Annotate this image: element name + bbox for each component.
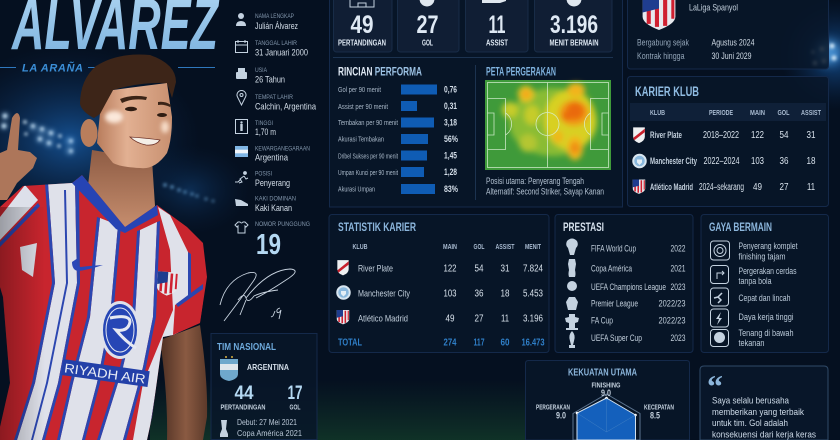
row: total: 117 bbox=[474, 338, 485, 348]
achievement years: 2021 bbox=[670, 264, 686, 274]
club career header: MAIN bbox=[750, 108, 765, 117]
age: 26 Tahun bbox=[255, 74, 285, 86]
performance bars bbox=[401, 84, 437, 194]
icon: calendar bbox=[236, 40, 248, 52]
row: Atletico Madrid: 3.196 bbox=[523, 314, 543, 324]
height: 1,70 m bbox=[255, 127, 276, 138]
row: Atletico Madrid: 11 bbox=[501, 314, 509, 324]
performance values: 1,45 bbox=[444, 150, 457, 160]
performance labels bbox=[338, 87, 398, 194]
club career header: KLUB bbox=[650, 108, 665, 117]
heatmap caption: Posisi utama: Penyerang Tengah bbox=[486, 176, 584, 186]
panel: career statistics bbox=[329, 214, 549, 352]
radar labels: 9.0 bbox=[601, 388, 611, 398]
trophy icons bbox=[565, 238, 579, 348]
full name: Julián Álvarez bbox=[255, 21, 298, 32]
player photo illustration bbox=[0, 54, 210, 440]
panel: playing style bbox=[701, 214, 828, 352]
row: Atletico Madrid: 11 bbox=[807, 182, 815, 193]
panel: playing style: Daya kerja tinggi bbox=[738, 312, 794, 322]
row: Atletico Madrid: 49 bbox=[446, 314, 455, 324]
panel: current club: LaLiga Spanyol bbox=[689, 2, 738, 14]
birth place bbox=[255, 94, 317, 112]
panel: playing style: Penyerang komplet bbox=[738, 241, 798, 251]
dominant foot bbox=[255, 196, 296, 211]
row: Manchester City: 18 bbox=[500, 288, 510, 300]
stat card: minutes bbox=[534, 0, 612, 52]
row: River Plate: River Plate bbox=[358, 264, 393, 274]
pointing hand bbox=[0, 113, 37, 200]
panel: overview and performance bbox=[330, 0, 622, 207]
stat card: matches: PERTANDINGAN bbox=[338, 38, 386, 48]
panel: national team: GOL bbox=[290, 404, 301, 412]
row: Manchester City bbox=[632, 154, 816, 168]
radar labels bbox=[536, 380, 674, 420]
achievement names: FIFA World Cup bbox=[591, 244, 636, 254]
panel: club career bbox=[628, 76, 828, 206]
panel: national team bbox=[211, 334, 317, 440]
subtitle: La Araña: LA ARAÑA bbox=[22, 62, 83, 74]
panel: national team: 44 bbox=[234, 383, 254, 404]
icon: movement arrow bbox=[710, 266, 728, 284]
club crest on shirt bbox=[156, 271, 178, 296]
panel: club career: KARIER KLUB bbox=[635, 84, 699, 99]
achievement years bbox=[658, 244, 686, 343]
performance values: 56% bbox=[444, 134, 458, 144]
row: Atletico Madrid: 2024–sekarang bbox=[699, 182, 744, 193]
row: Atletico Madrid: 27 bbox=[474, 314, 484, 324]
performance values: 0,31 bbox=[444, 101, 457, 111]
panel: national team: PERTANDINGAN bbox=[220, 404, 266, 412]
row: Manchester City: 103 bbox=[444, 288, 457, 300]
icon: target bbox=[710, 241, 730, 260]
performance labels: Assist per 90 menit bbox=[338, 104, 388, 111]
stat card: goals: 27 bbox=[416, 11, 438, 39]
stadium lights right bbox=[811, 40, 840, 65]
row: River Plate: 31 bbox=[500, 264, 510, 274]
panel: national team: ARGENTINA bbox=[247, 362, 289, 372]
nationality bbox=[255, 146, 310, 164]
achievement years: 2022/23 bbox=[658, 298, 686, 308]
player eyes and brows bbox=[120, 96, 171, 117]
performance labels: Dribel Sukses per 90 menit bbox=[338, 154, 398, 160]
quote mark: “ bbox=[707, 368, 723, 404]
panel: quote: Saya selalu berusaha bbox=[712, 396, 790, 406]
icon: runner bbox=[235, 172, 248, 183]
panel: quote bbox=[700, 366, 828, 440]
performance labels: Tembakan per 90 menit bbox=[338, 120, 398, 127]
icon: location pin bbox=[237, 90, 246, 105]
nationality: Argentina bbox=[255, 152, 289, 164]
stat card: minutes: 3.196 bbox=[550, 11, 598, 39]
panel: national team: TIM NASIONAL bbox=[217, 341, 276, 353]
table header: MAIN bbox=[443, 242, 457, 251]
table header: MENIT bbox=[525, 242, 541, 251]
performance breakdown: RINCIAN PERFORMA bbox=[338, 66, 422, 78]
stat card: assists: ASSIST bbox=[486, 38, 509, 48]
shirt collar bbox=[72, 175, 158, 233]
row: total: TOTAL bbox=[338, 338, 362, 348]
position: Penyerang bbox=[255, 178, 290, 189]
achievement names: Premier League bbox=[591, 298, 638, 308]
player neck bbox=[88, 150, 155, 232]
birth date: 31 Januari 2000 bbox=[255, 48, 308, 58]
row: Manchester City: Manchester City bbox=[358, 288, 410, 300]
club career header bbox=[630, 103, 826, 121]
row: Atletico Madrid bbox=[633, 180, 815, 194]
radar labels: PERGERAKAN bbox=[536, 402, 570, 412]
panel: current club: Agustus 2024 bbox=[712, 38, 754, 48]
row: Manchester City: Manchester City bbox=[650, 156, 697, 167]
age: USIA bbox=[255, 67, 267, 74]
row: Atletico Madrid bbox=[337, 310, 543, 324]
achievement names: UEFA Super Cup bbox=[591, 333, 642, 343]
icon: brain bbox=[710, 330, 728, 346]
performance values: 1,28 bbox=[444, 167, 457, 177]
shirt number: NOMOR PUNGGUNG bbox=[255, 221, 310, 228]
row: River Plate: 122 bbox=[444, 264, 457, 274]
achievement names bbox=[591, 244, 666, 343]
birth place: Calchin, Argentina bbox=[255, 102, 317, 112]
performance breakdown bbox=[338, 66, 458, 194]
stadium lights left bbox=[1, 113, 214, 202]
radar labels: 8.5 bbox=[650, 410, 660, 420]
panel: achievements: PRESTASI bbox=[563, 222, 604, 234]
row: River Plate: 7.824 bbox=[523, 264, 543, 274]
stat card: matches: 49 bbox=[350, 11, 374, 39]
player arm bbox=[160, 325, 207, 440]
height bbox=[255, 120, 276, 136]
icon: lightning bbox=[710, 309, 728, 327]
age bbox=[255, 68, 284, 82]
heatmap caption bbox=[486, 176, 604, 196]
panel: achievements bbox=[555, 214, 693, 352]
panel: playing style: Tenang di bawah bbox=[738, 328, 794, 338]
dominant foot: Kaki Kanan bbox=[255, 203, 292, 214]
performance labels: Akurasi Umpan bbox=[338, 186, 375, 194]
stat card: minutes: MENIT BERMAIN bbox=[550, 38, 598, 48]
row: River Plate bbox=[337, 260, 543, 275]
radar labels: KECEPATAN bbox=[644, 402, 674, 412]
signature bbox=[220, 269, 295, 321]
shirt number: 19 bbox=[256, 229, 281, 261]
performance values: 0,76 bbox=[444, 84, 457, 94]
stat card: goals bbox=[398, 0, 459, 52]
stat card: matches bbox=[334, 0, 392, 52]
position: POSISI bbox=[255, 170, 272, 178]
achievement years: 2022/23 bbox=[658, 316, 686, 326]
pitch lines bbox=[488, 82, 608, 168]
panel: playing style: Pergerakan cerdas bbox=[738, 266, 797, 276]
full name bbox=[255, 14, 298, 29]
icon: person bbox=[236, 13, 246, 26]
radar labels: FINISHING bbox=[592, 380, 621, 390]
birth place: TEMPAT LAHIR bbox=[255, 94, 293, 101]
panel: playing style: tanpa bola bbox=[738, 276, 772, 286]
achievement years: 2023 bbox=[670, 333, 686, 343]
icon: clock bbox=[566, 0, 582, 6]
player shirt bbox=[0, 170, 210, 440]
dominant foot: KAKI DOMINAN bbox=[255, 196, 296, 202]
row: River Plate: River Plate bbox=[650, 130, 682, 141]
row: Atletico Madrid: 49 bbox=[753, 182, 762, 193]
position bbox=[255, 170, 290, 189]
icon: ball bbox=[420, 0, 434, 6]
table header: GOL bbox=[474, 242, 485, 251]
achievement years: 2023 bbox=[670, 282, 686, 292]
table header: KLUB bbox=[352, 242, 368, 251]
face highlights bbox=[105, 111, 169, 133]
club career header: PERIODE bbox=[709, 108, 733, 117]
player hair bbox=[80, 54, 176, 118]
achievement names: Copa América bbox=[591, 264, 632, 274]
panel: current club: 30 Juni 2029 bbox=[712, 51, 752, 61]
performance values bbox=[444, 84, 458, 194]
achievement years: 2022 bbox=[670, 244, 686, 254]
icon: trophy bbox=[220, 420, 228, 437]
icon: pitch bbox=[350, 0, 374, 7]
Argentina crest bbox=[220, 356, 238, 381]
performance labels: Akurasi Tembakan bbox=[338, 136, 384, 144]
birth date: TANGGAL LAHIR bbox=[255, 40, 297, 47]
row: River Plate: 122 bbox=[751, 130, 764, 141]
panel: current club: Kontrak hingga bbox=[637, 51, 684, 61]
club career header: GOL bbox=[778, 108, 790, 117]
row: Manchester City: 36 bbox=[780, 156, 789, 167]
row: River Plate: 31 bbox=[806, 130, 816, 141]
shirt stripes bbox=[0, 183, 203, 440]
crest: Atletico Madrid bbox=[643, 0, 675, 30]
panel: national team: 17 bbox=[288, 383, 302, 404]
movement heatmap bbox=[485, 66, 611, 196]
icon: Argentina flag bbox=[235, 146, 248, 157]
player smile bbox=[130, 137, 160, 145]
radar labels: 9.0 bbox=[556, 410, 566, 420]
icon: height bbox=[236, 120, 248, 134]
panel: main strengths radar bbox=[526, 360, 690, 440]
panel: current club bbox=[628, 0, 828, 69]
row: Manchester City: 5.453 bbox=[523, 288, 543, 300]
sponsor logo bbox=[103, 301, 137, 359]
panel: playing style: finishing tajam bbox=[738, 252, 786, 262]
club career header: ASSIST bbox=[801, 108, 821, 117]
performance values: 83% bbox=[444, 184, 458, 194]
row: Manchester City bbox=[336, 285, 543, 300]
performance labels: Gol per 90 menit bbox=[338, 87, 381, 94]
row: Manchester City: 36 bbox=[474, 288, 484, 300]
row: Manchester City: 18 bbox=[806, 156, 816, 167]
stat card: goals: GOL bbox=[422, 38, 433, 48]
row: Atletico Madrid: Atlético Madrid bbox=[358, 314, 408, 324]
shirt number bbox=[255, 221, 310, 261]
icon: running speed bbox=[710, 288, 728, 306]
row: Atletico Madrid: Atlético Madrid bbox=[650, 182, 693, 193]
row: River Plate: 2018–2022 bbox=[703, 130, 739, 141]
row: River Plate bbox=[633, 127, 816, 143]
panel: playing style: GAYA BERMAIN bbox=[709, 222, 772, 234]
nike swoosh bbox=[72, 258, 103, 271]
panel: main strengths radar: KEKUATAN UTAMA bbox=[568, 368, 637, 378]
player face bbox=[97, 83, 172, 168]
row: Manchester City: 2022–2024 bbox=[704, 156, 740, 167]
heatmap caption: Alternatif: Second Striker, Sayap Kanan bbox=[486, 186, 604, 196]
icon: boot bbox=[482, 0, 506, 3]
movement heatmap: PETA PERGERAKAN bbox=[486, 66, 556, 78]
row: total bbox=[338, 338, 545, 348]
panel: current club: Bergabung sejak bbox=[637, 38, 689, 48]
panel: career statistics: STATISTIK KARIER bbox=[338, 222, 417, 234]
row: total: 274 bbox=[444, 338, 457, 348]
row: River Plate: 54 bbox=[780, 130, 789, 141]
panel: national team: Copa América 2021 bbox=[237, 428, 302, 438]
stat card: assists bbox=[466, 0, 528, 52]
row: total: 60 bbox=[500, 338, 510, 348]
panel: quote: untuk tim. Gol adalah bbox=[712, 418, 788, 429]
row: total: 16.473 bbox=[522, 338, 545, 348]
height: TINGGI bbox=[255, 120, 273, 127]
table header: ASSIST bbox=[496, 242, 515, 251]
nationality: KEWARGANEGARAAN bbox=[255, 146, 310, 152]
stat card: assists: 11 bbox=[488, 11, 506, 39]
player ear bbox=[80, 119, 98, 147]
personal info list bbox=[235, 13, 317, 261]
row: River Plate: 54 bbox=[474, 264, 484, 274]
panel: national team: Debut: 27 Mei 2021 bbox=[237, 417, 297, 427]
row: Atletico Madrid: 27 bbox=[780, 182, 789, 193]
icon: cake bbox=[236, 68, 247, 79]
sponsor banner: RIYADH AIR bbox=[63, 360, 147, 387]
panel: playing style: Cepat dan lincah bbox=[738, 293, 790, 303]
achievement names: FA Cup bbox=[591, 316, 613, 326]
row: Manchester City: 103 bbox=[751, 156, 764, 167]
performance values: 3,18 bbox=[444, 118, 457, 128]
performance labels: Umpan Kunci per 90 menit bbox=[338, 170, 398, 177]
icon: shirt bbox=[235, 222, 248, 233]
panel: playing style: tekanan bbox=[738, 338, 764, 348]
radar chart bbox=[573, 394, 640, 440]
full name: NAMA LENGKAP bbox=[255, 13, 294, 20]
panel: quote: memberikan yang terbaik bbox=[712, 407, 804, 418]
icon: boot bbox=[235, 199, 248, 206]
table header bbox=[352, 242, 541, 251]
birth date bbox=[255, 40, 308, 56]
achievement names: UEFA Champions League bbox=[591, 282, 666, 292]
